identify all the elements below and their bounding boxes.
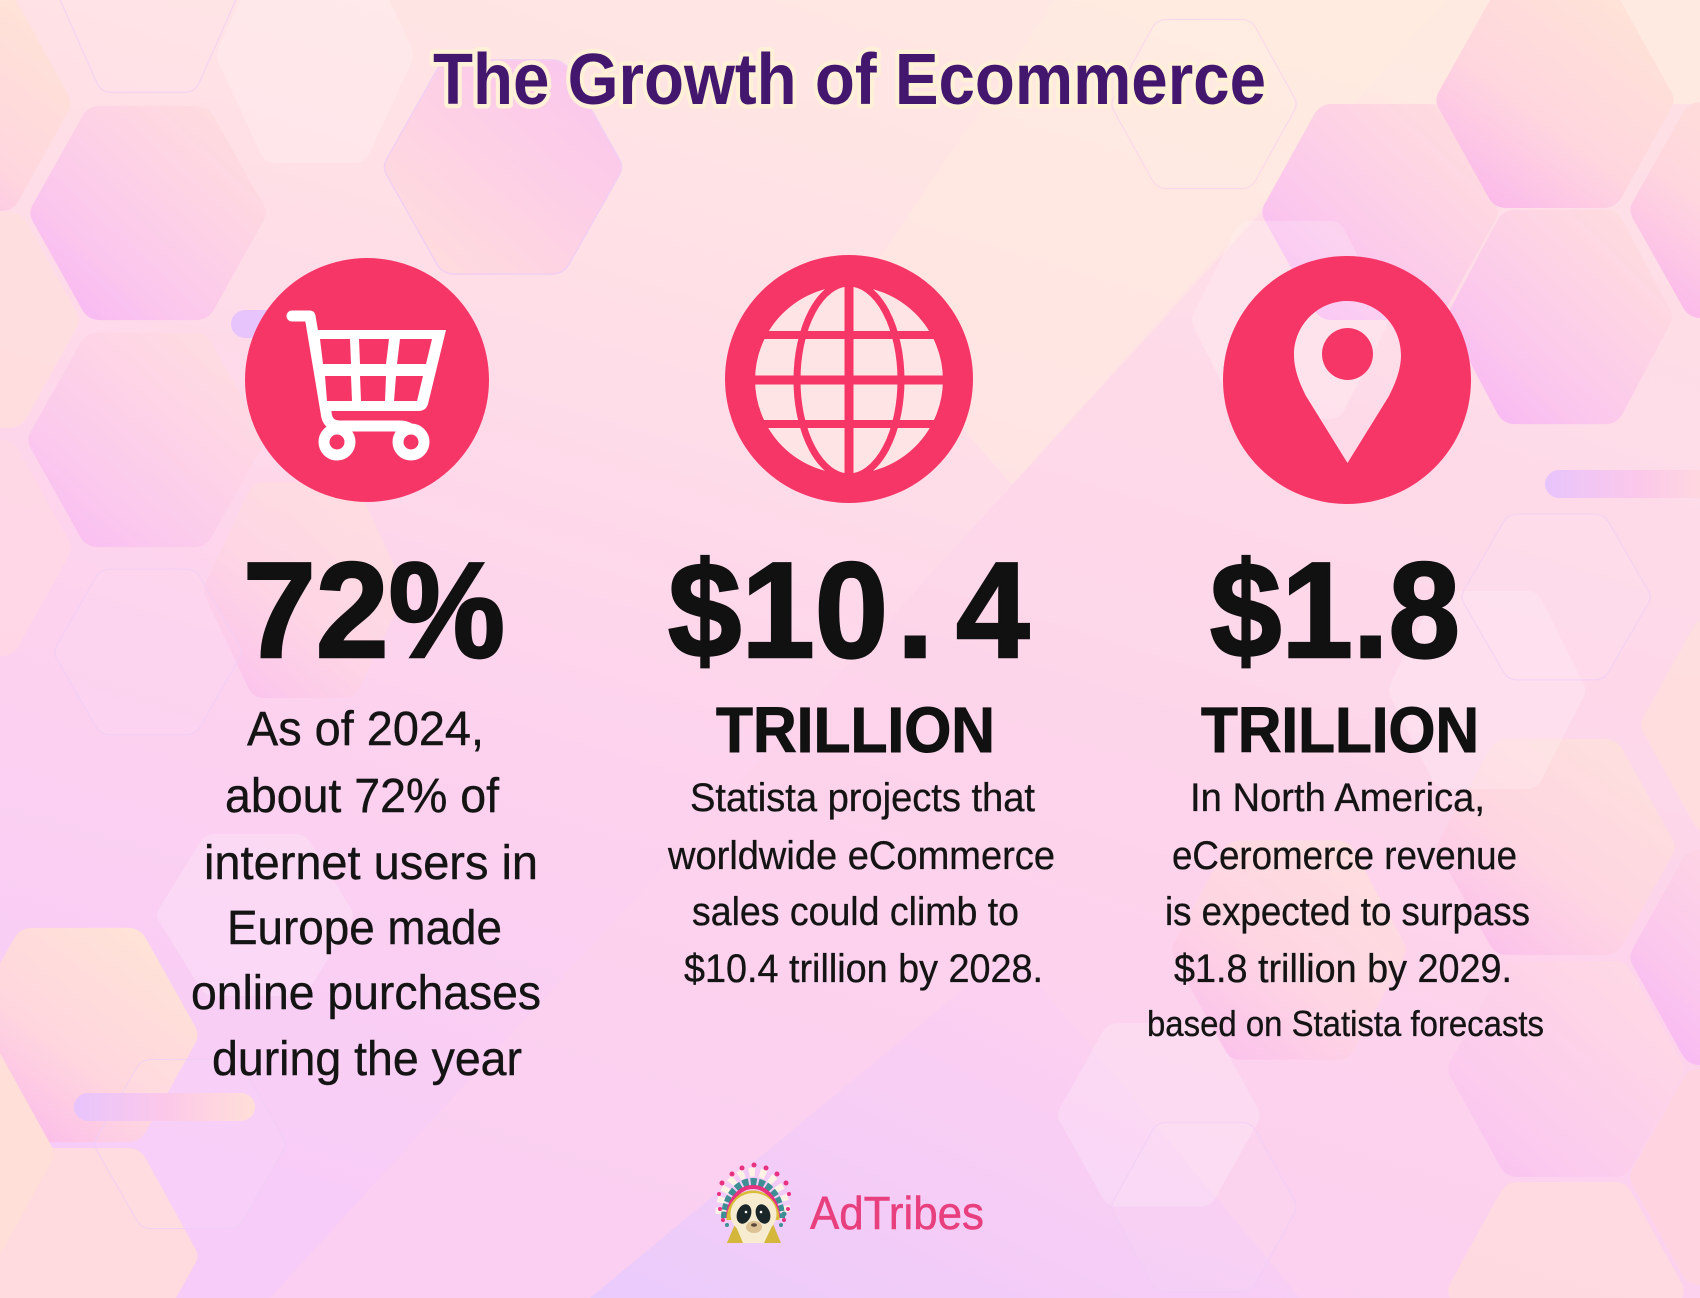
text: 72% description: internet users in <box>204 837 538 890</box>
icon: location pin <box>1223 256 1471 504</box>
decorative pills <box>74 310 1700 1121</box>
statistic: $10.4: 4 <box>956 535 1029 686</box>
text: $1.8 description <box>1147 776 1544 1044</box>
text: $1.8 description: $1.8 trillion by 2029. <box>1174 947 1512 991</box>
label: trillion: TRILLION <box>716 694 995 766</box>
statistic: $1.8: $1.8 <box>1210 534 1460 686</box>
text: 72% description: Europe made <box>227 902 502 955</box>
text: 72% description: As of 2024, <box>247 703 484 756</box>
icon: panda with headdress <box>717 1162 791 1243</box>
panel: 72 percent <box>191 258 541 1086</box>
panel: 1.8 trillion <box>1147 256 1544 1044</box>
label: trillion: TRILLION <box>1201 694 1479 766</box>
statistic: $10.4: $10 <box>668 535 888 686</box>
wordmark: AdTribes <box>810 1187 984 1239</box>
text: 72% description: during the year <box>212 1033 522 1086</box>
text: $10.4 description: Statista projects that <box>690 776 1035 820</box>
text: $1.8 description: eCeromerce revenue <box>1172 834 1517 878</box>
panel: 10.4 trillion <box>667 255 1055 991</box>
text: $10.4 description <box>667 776 1055 991</box>
text: $1.8 description: is expected to surpass <box>1165 890 1530 934</box>
title: The Growth of Ecommerce <box>433 40 1266 120</box>
icon: shopping cart <box>245 258 489 502</box>
text: $1.8 description: In North America, <box>1190 776 1485 820</box>
light hexagons <box>157 0 1585 1207</box>
logo: AdTribes <box>717 1162 984 1243</box>
icon: globe <box>725 255 973 503</box>
text: 72% description: online purchases <box>191 967 541 1020</box>
text: 72% description <box>191 703 541 1086</box>
statistic: $10.4: . <box>897 535 934 686</box>
text: 72% description: about 72% of <box>225 770 500 823</box>
text: $10.4 description: worldwide eCommerce <box>667 834 1055 878</box>
text: $1.8 description: based on Statista forecasts <box>1147 1003 1544 1044</box>
statistic: 72%: 72% <box>243 534 505 686</box>
text: $10.4 description: sales could climb to <box>692 890 1019 934</box>
text: $10.4 description: $10.4 trillion by 2028. <box>684 947 1043 991</box>
